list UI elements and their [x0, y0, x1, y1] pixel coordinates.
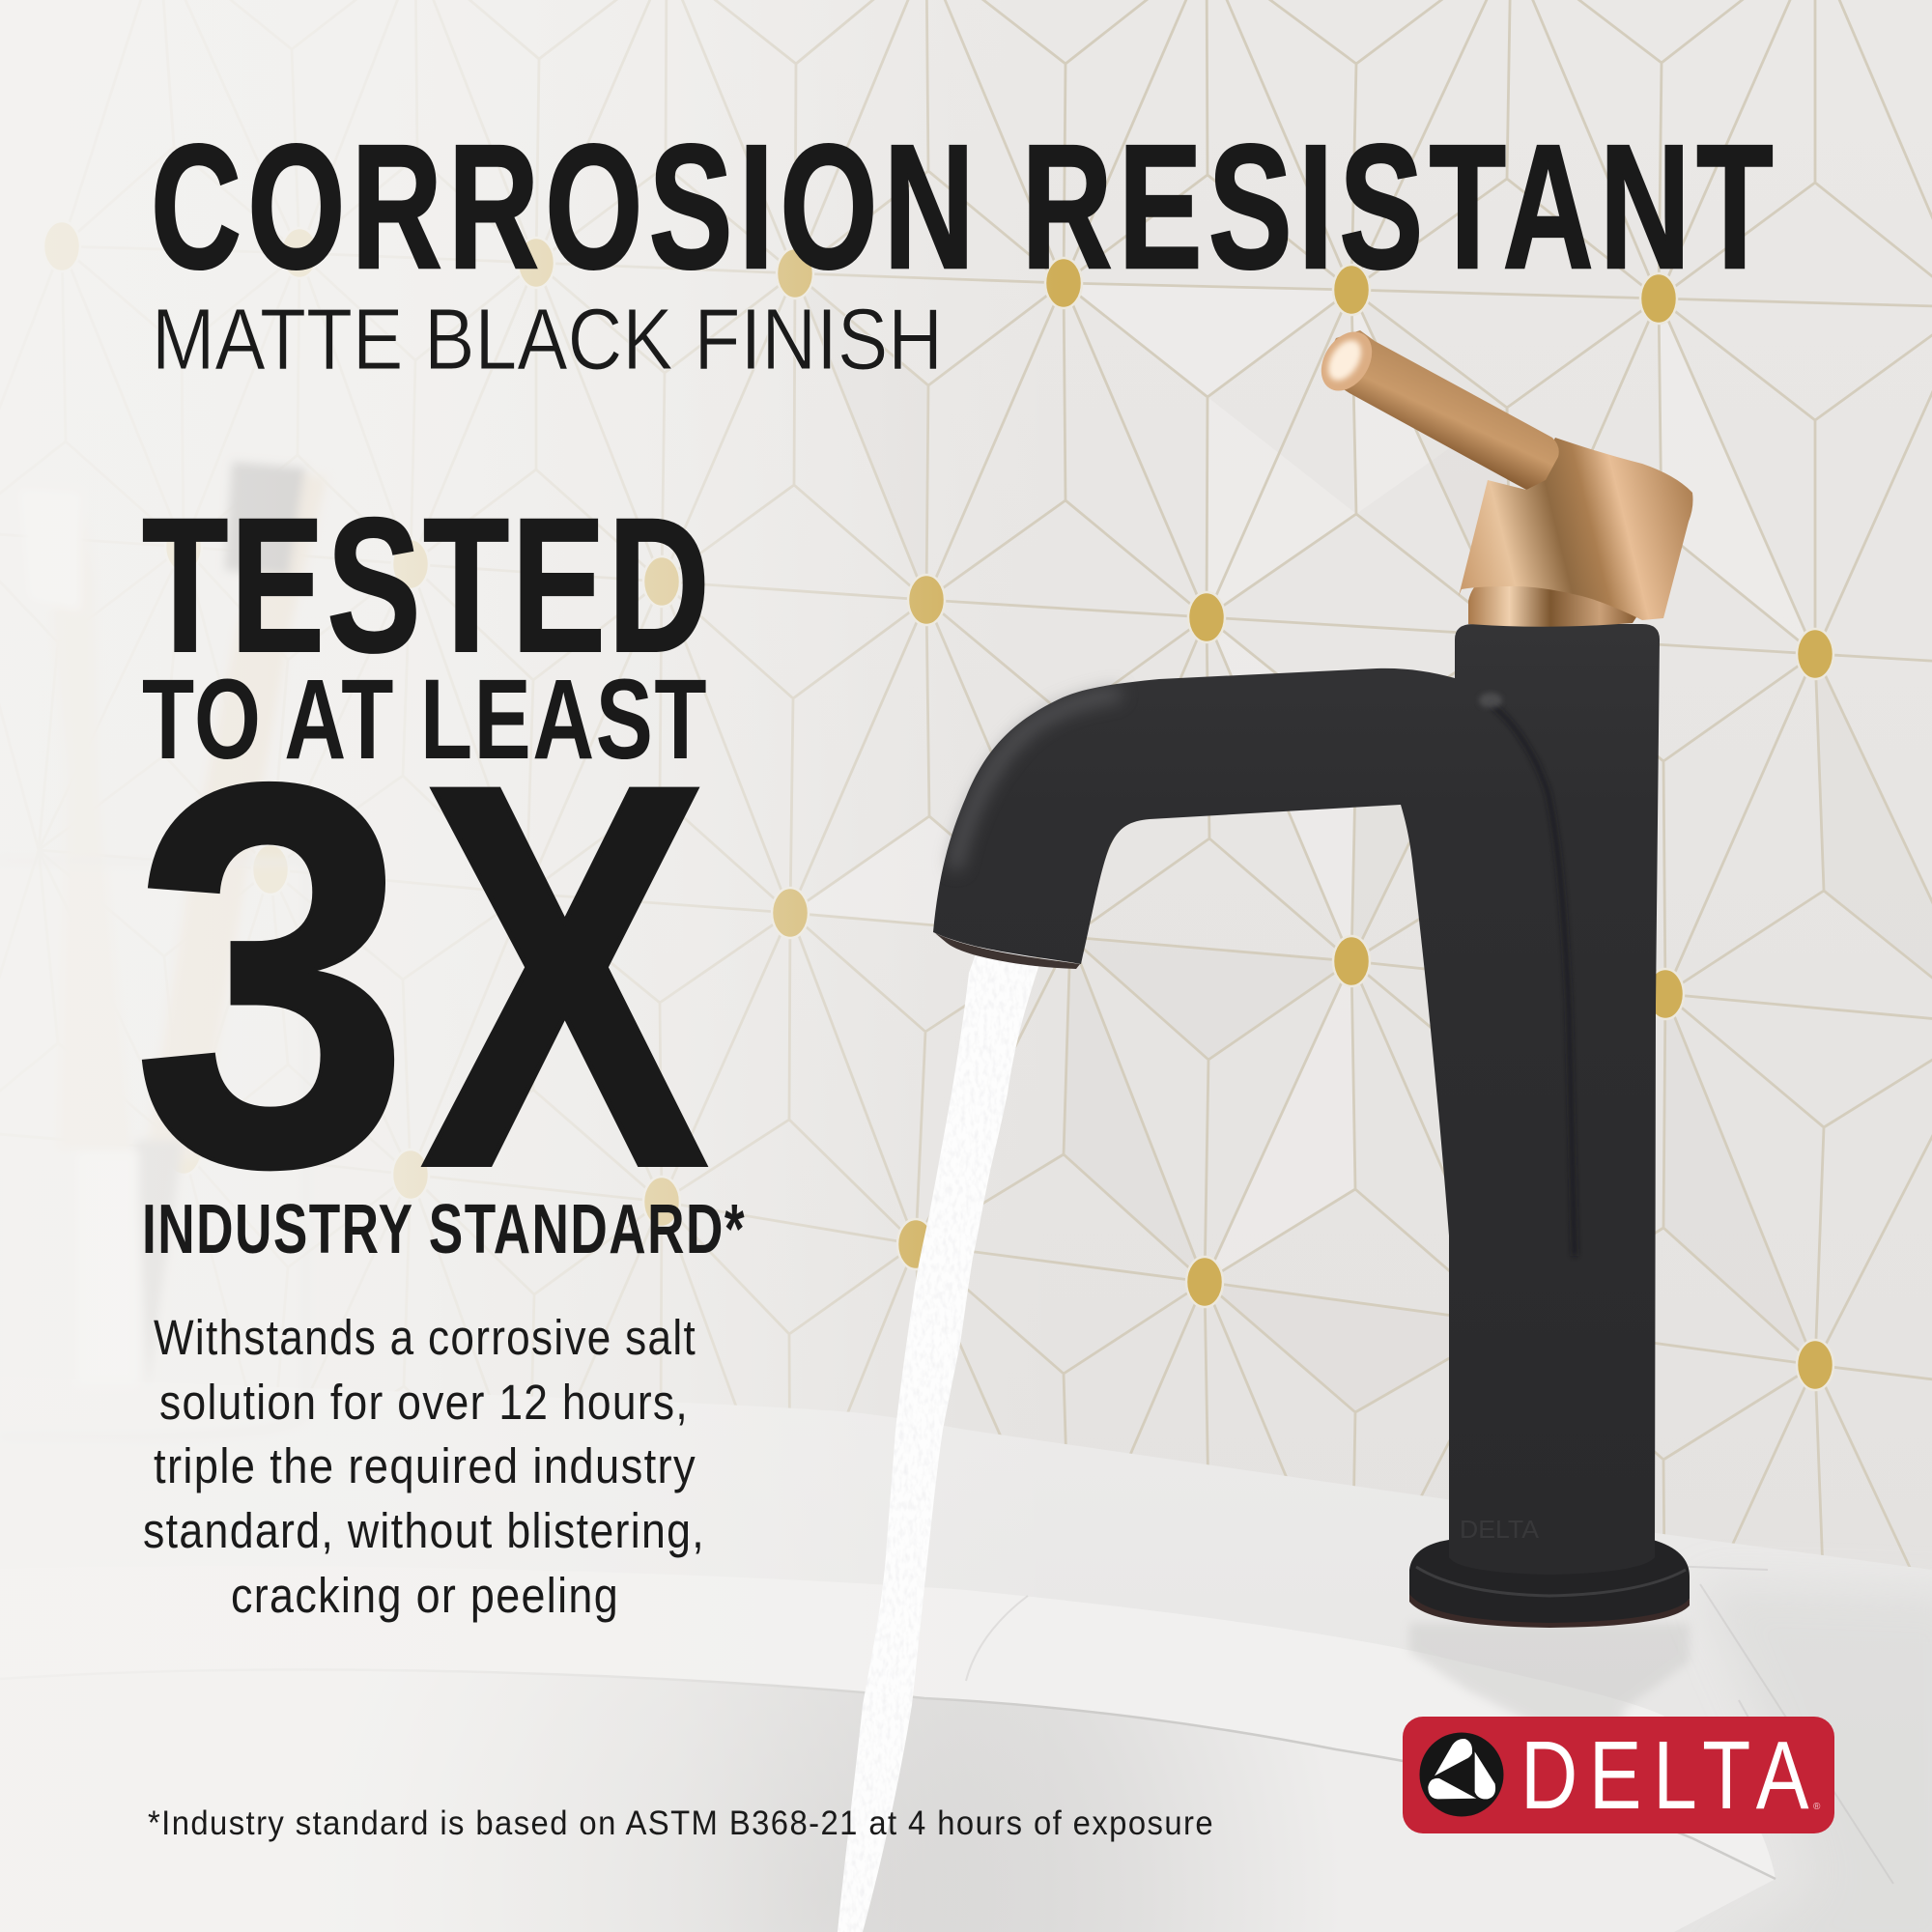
faucet column and spout — [933, 624, 1660, 1575]
spout highlight — [954, 694, 1121, 869]
brass inlay dots — [43, 221, 1833, 1390]
body copy: solution for over 12 hours, — [159, 1375, 689, 1430]
nozzle aerator — [935, 933, 1080, 969]
logo black circle with triangle mark — [1420, 1733, 1503, 1816]
glass cup — [0, 862, 305, 1436]
body copy: Withstands a corrosive salt — [154, 1310, 696, 1365]
registered mark: ® — [1813, 1802, 1821, 1812]
wall tile shading — [790, 273, 1932, 1412]
engraved logo on column: DELTA — [1460, 1515, 1540, 1544]
dark bristles — [225, 462, 306, 578]
basin rim — [0, 1566, 1776, 1879]
faucet base reflection — [1409, 1623, 1690, 1768]
countertop — [0, 1377, 1932, 1932]
spout collar highlight — [1479, 693, 1502, 708]
counter grey shadow right — [1700, 1584, 1932, 1932]
logo wordmark: DELTA — [1520, 1721, 1820, 1830]
gold handle lever — [1323, 330, 1559, 490]
gold handle collar — [1468, 578, 1642, 627]
logo red badge — [1403, 1717, 1834, 1833]
gold handle body — [1459, 438, 1692, 620]
claim: to at least: TO AT LEAST — [142, 656, 708, 783]
footnote: *Industry standard is based on ASTM B368-21 at 4 hours of exposure — [148, 1804, 1214, 1842]
faucet — [933, 323, 1692, 1628]
claim: industry standard: INDUSTRY STANDARD* — [142, 1191, 746, 1268]
basin interior — [0, 1670, 1776, 1932]
body copy: cracking or peeling — [231, 1568, 619, 1623]
white cap — [77, 1152, 138, 1384]
marble veins — [966, 1565, 1893, 1884]
claim: X: X — [421, 672, 710, 1280]
basin edge shadow — [0, 1670, 1776, 1879]
claim: tested: TESTED — [142, 478, 712, 692]
panel: marble countertop and basin — [0, 1377, 1932, 1932]
lower dark bristles — [135, 1140, 184, 1391]
toothbrush white handle — [53, 502, 130, 1150]
claim block — [132, 478, 746, 1280]
water stream — [838, 945, 1039, 1932]
subtitle: Matte Black Finish: MATTE BLACK FINISH — [152, 292, 943, 388]
body copy — [143, 1310, 705, 1623]
lever tip highlight — [1321, 334, 1368, 386]
body copy: standard, without blistering, — [143, 1503, 705, 1558]
lever tip — [1311, 323, 1382, 400]
seam between spout and column — [1490, 703, 1575, 1256]
toothbrush cup, washed out — [0, 462, 327, 1436]
Delta logo — [1403, 1717, 1834, 1833]
body copy: triple the required industry — [154, 1438, 696, 1493]
claim: 3: 3 — [132, 671, 411, 1279]
faucet base plate — [1409, 1540, 1690, 1628]
toothbrush wood handle — [145, 473, 327, 1159]
white bristles — [19, 489, 80, 611]
